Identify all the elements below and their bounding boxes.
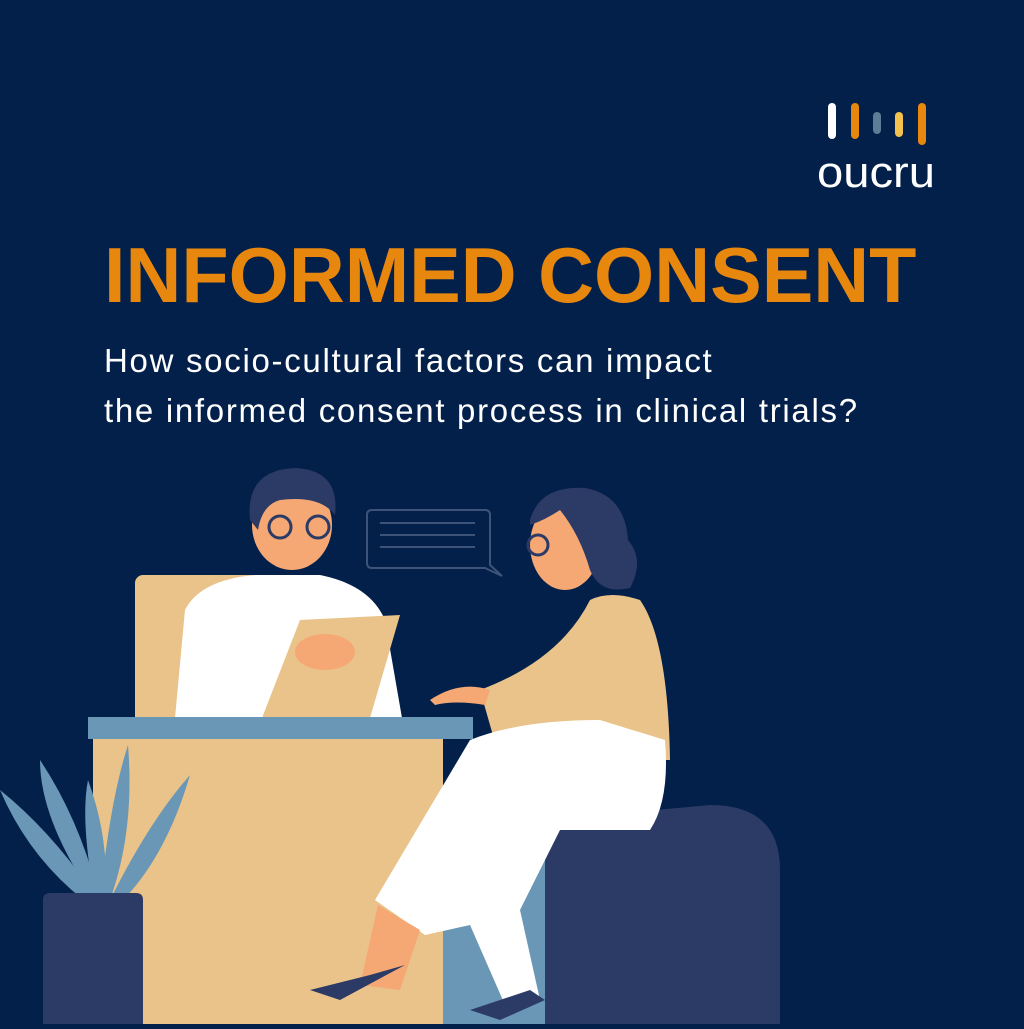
man bbox=[175, 468, 402, 718]
pot bbox=[43, 893, 143, 1024]
woman bbox=[310, 488, 670, 1020]
speech bubble bbox=[367, 510, 502, 576]
subtitle: the informed consent process in clinical trials? bbox=[104, 392, 859, 429]
pouf seat bbox=[545, 805, 780, 1024]
subtitle: How socio-cultural factors can impact bbox=[104, 342, 713, 379]
subtitle bbox=[104, 342, 859, 429]
desk bbox=[88, 717, 473, 739]
logo bbox=[817, 103, 935, 192]
man's chair bbox=[135, 575, 260, 725]
floor bbox=[330, 830, 560, 1024]
plant bbox=[0, 745, 190, 905]
illustration: consultation scene bbox=[0, 468, 780, 1024]
title: INFORMED CONSENT bbox=[104, 231, 916, 319]
